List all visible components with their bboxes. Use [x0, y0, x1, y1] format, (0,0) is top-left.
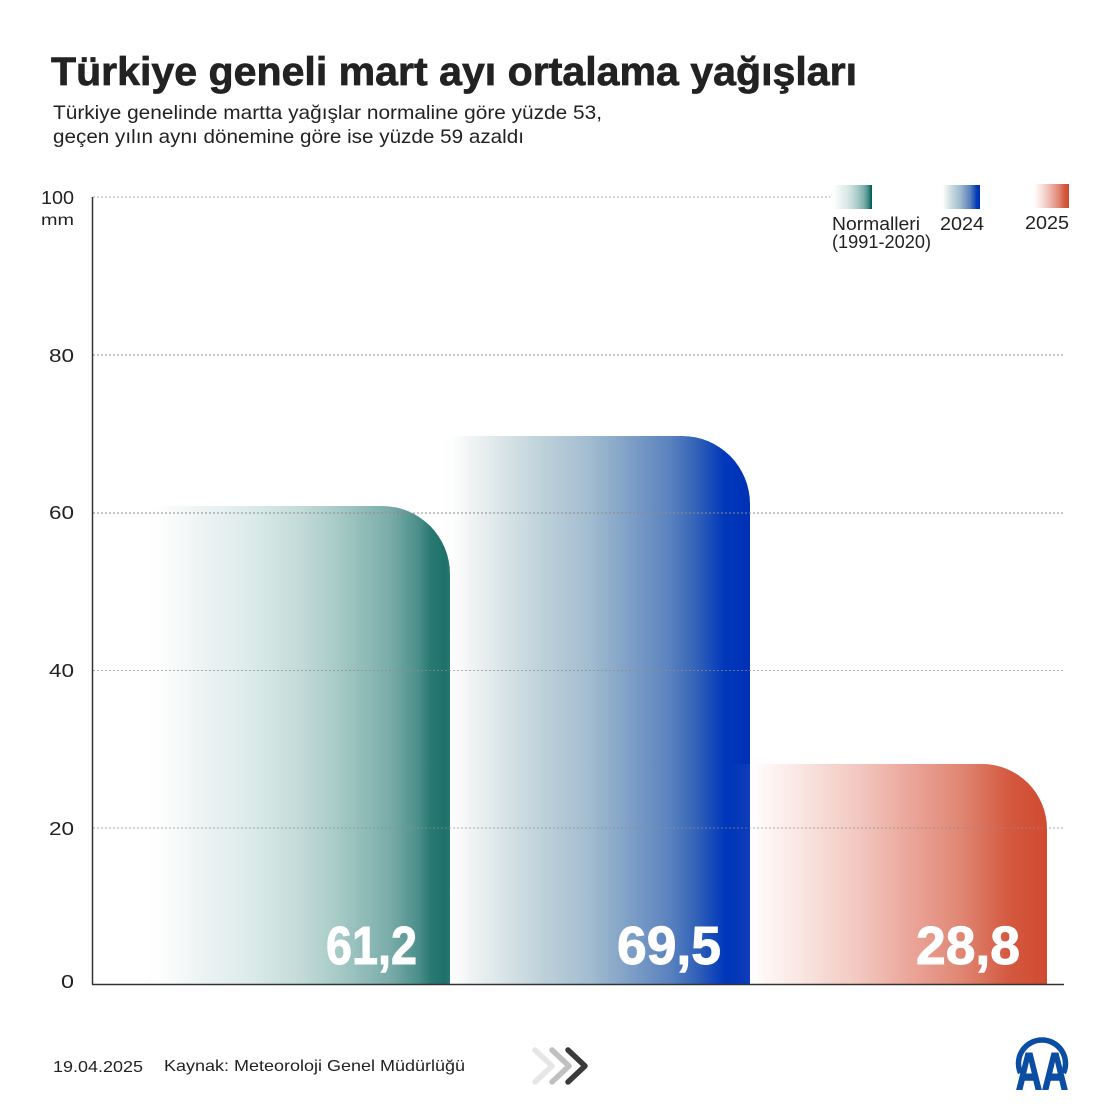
subtitle: geçen yılın aynı dönemine göre ise yüzde 59 azaldı [53, 126, 524, 148]
value labels: 61,2 [326, 916, 417, 976]
bar: 2025 28,8 [730, 764, 1047, 984]
y axis labels: 60 [49, 503, 74, 523]
value labels [326, 916, 1020, 976]
subtitle [53, 102, 602, 148]
footer date: 19.04.2025 [53, 1059, 143, 1076]
icon: chevrons [535, 1050, 585, 1082]
y axis labels: 40 [49, 661, 74, 681]
legend label: 2025: 2025 [1025, 212, 1069, 233]
y axis labels: 100 [41, 188, 74, 208]
legend label: Normalleri [832, 213, 931, 252]
bar: 2024 69,5 [430, 436, 750, 984]
icon: AA logo: AA [1016, 1043, 1068, 1101]
y axis and baseline [92, 197, 1064, 984]
y axis labels: 80 [49, 346, 74, 366]
title: Türkiye geneli mart ayı ortalama yağışları [51, 50, 857, 94]
value labels: 69,5 [617, 916, 721, 976]
bar: Normalleri 61,2 [140, 506, 450, 984]
subtitle: Türkiye genelinde martta yağışlar normaline göre yüzde 53, [53, 102, 602, 124]
legend label: Normalleri: Normalleri [832, 213, 920, 234]
y axis labels [41, 188, 74, 992]
y axis labels: 0 [61, 972, 74, 992]
icon: AA logo [1016, 1040, 1068, 1101]
legend [832, 184, 1069, 252]
footer source: Kaynak: Meteoroloji Genel Müdürlüğü [164, 1058, 465, 1075]
legend swatch: Normalleri [832, 185, 872, 209]
legend swatch: 2024 [940, 185, 980, 209]
grid lines [93, 197, 1065, 828]
y axis labels: 20 [49, 819, 74, 839]
legend label: Normalleri: (1991-2020) [832, 231, 931, 252]
legend label: 2024: 2024 [940, 213, 984, 234]
y axis labels: mm [41, 212, 74, 229]
legend swatch: 2025 [1032, 184, 1069, 208]
value labels: 28,8 [916, 916, 1020, 976]
